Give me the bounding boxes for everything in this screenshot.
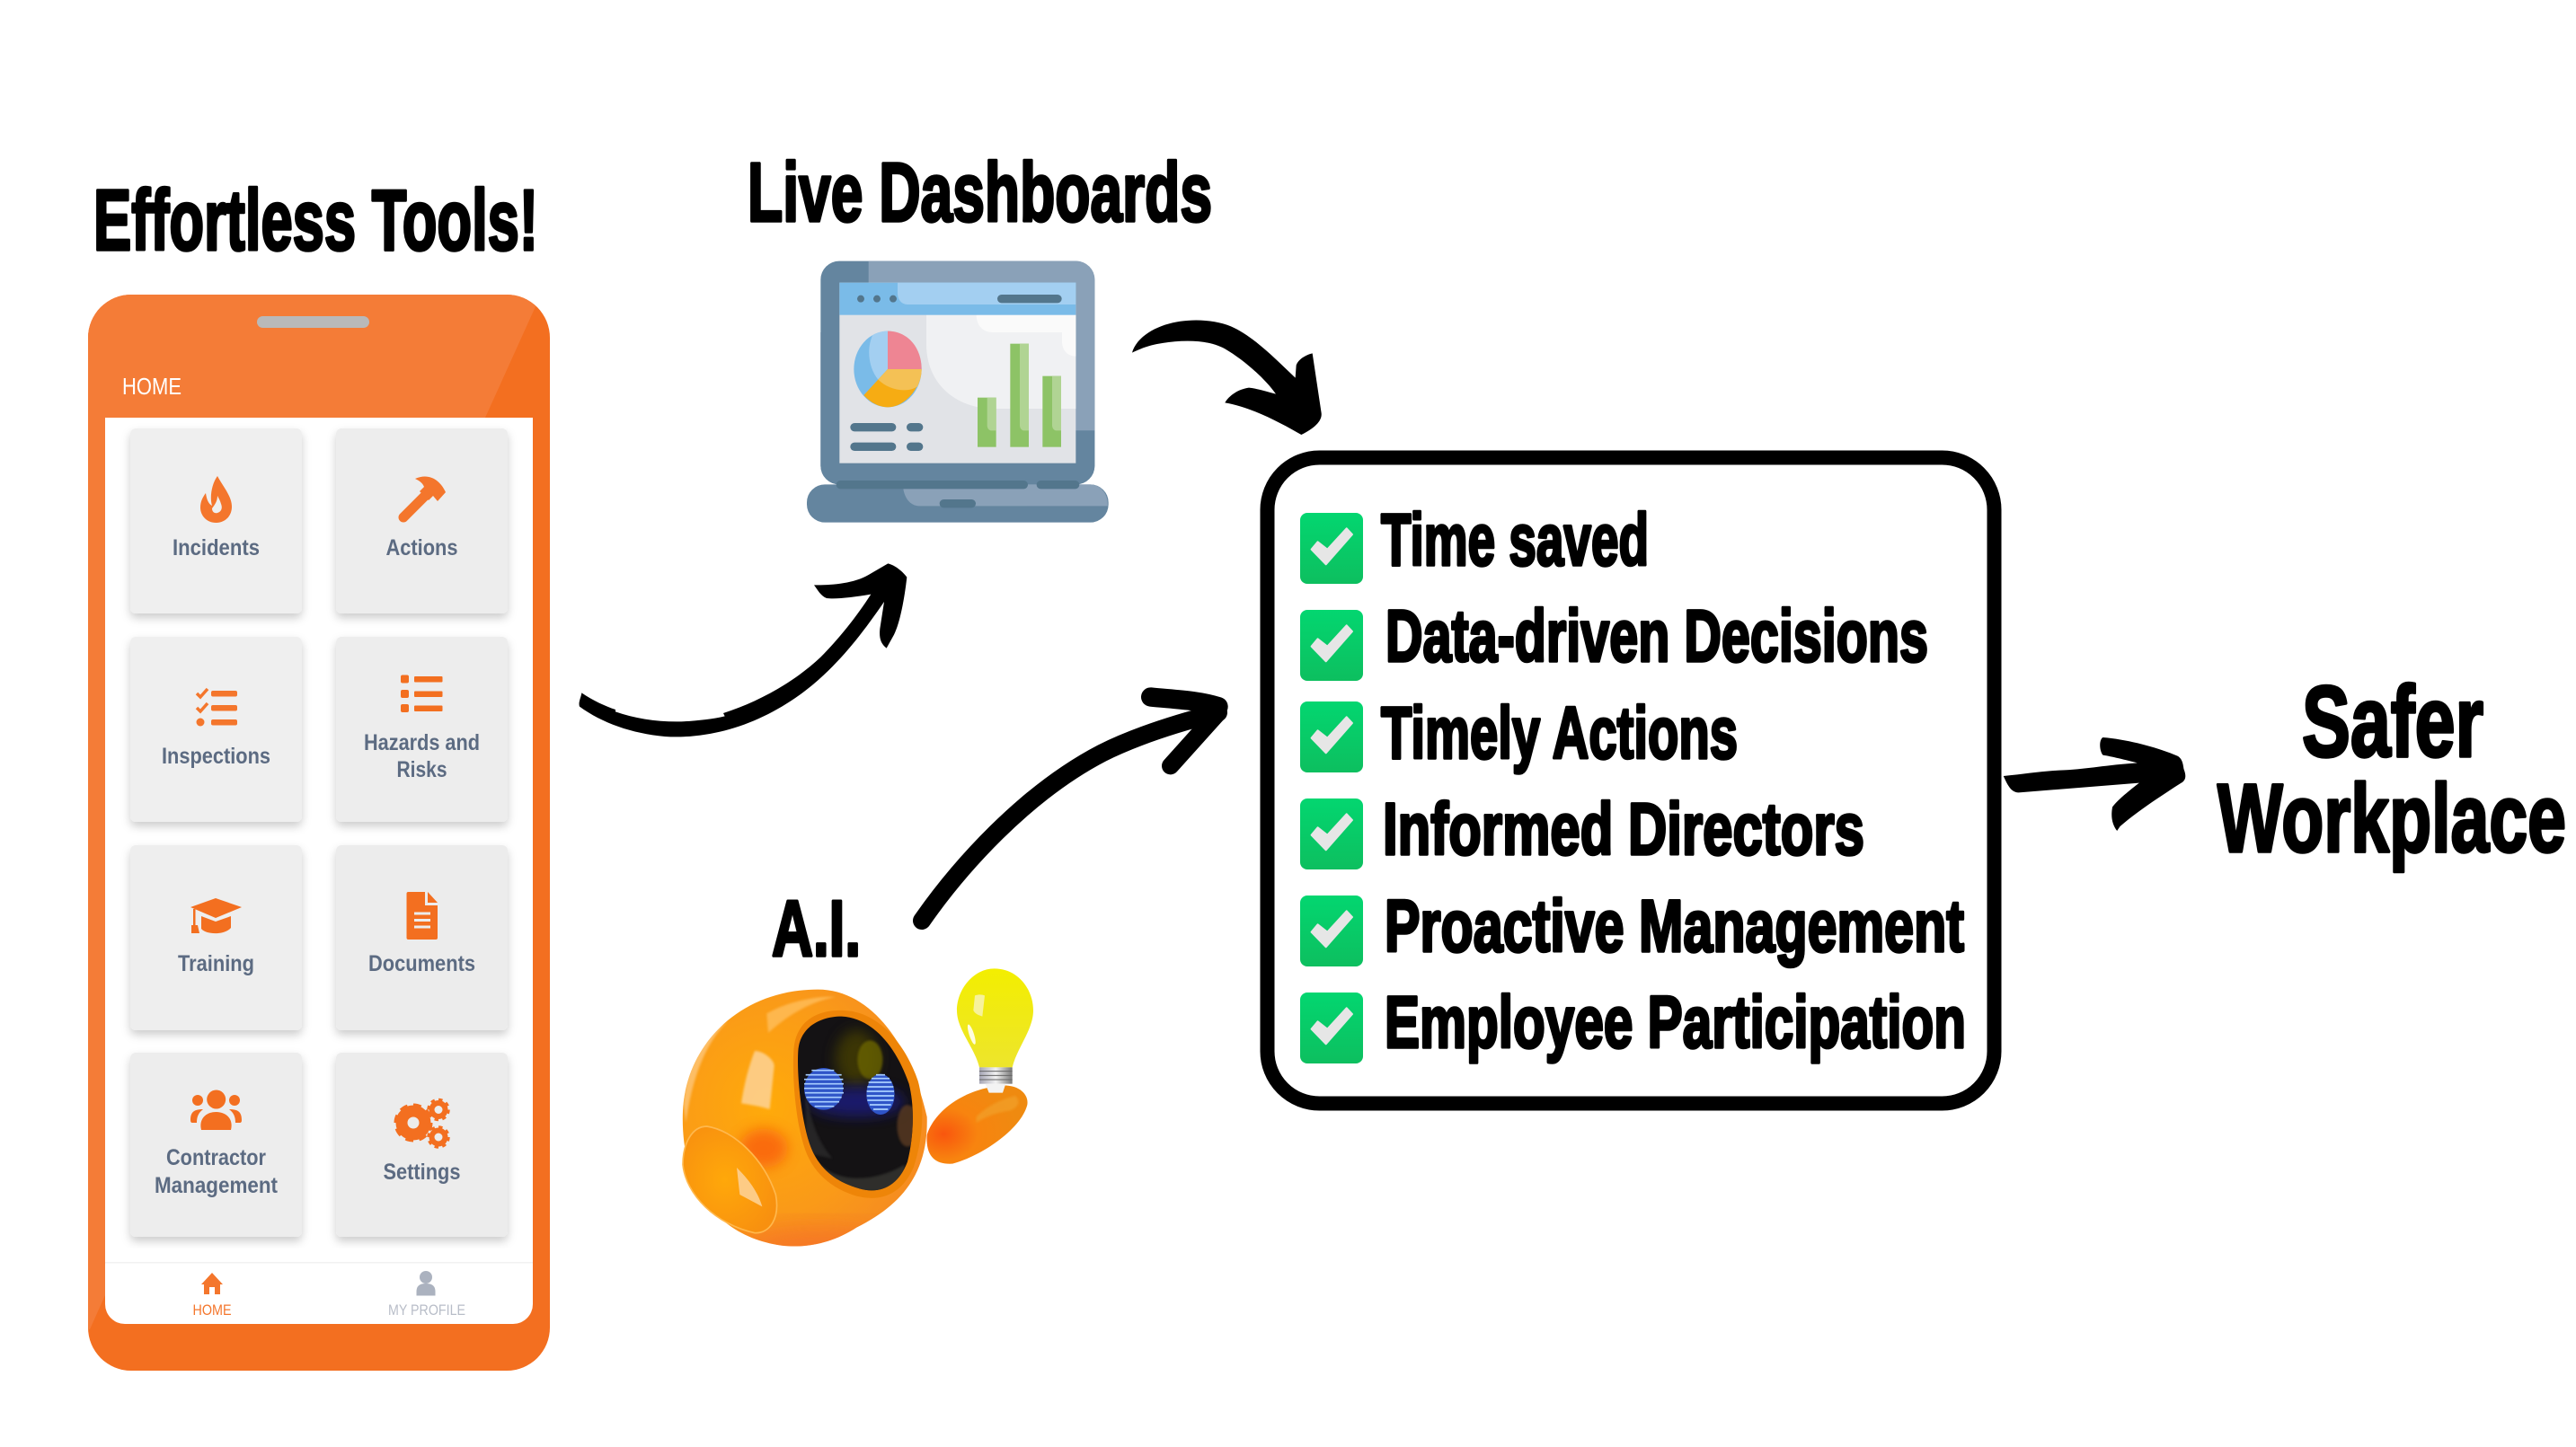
phone body highlight xyxy=(88,295,541,1329)
heading: Safer Workplace xyxy=(2217,666,2566,872)
icon: document xyxy=(406,892,438,940)
checklist item: Proactive Management: Proactive Management xyxy=(1385,886,1964,967)
pie chart xyxy=(854,331,922,407)
browser bar xyxy=(839,283,1076,315)
robot left arm xyxy=(683,1126,776,1233)
menu card: Documents xyxy=(336,845,508,1030)
menu card: Contractor Management: Contractor xyxy=(166,1145,266,1170)
icon: hammer xyxy=(403,477,446,517)
checklist item: Time saved: Time saved xyxy=(1381,499,1649,581)
bar chart xyxy=(978,344,1061,447)
robot eyes xyxy=(804,1068,895,1115)
menu card: Contractor Management xyxy=(130,1053,302,1237)
header label: HOME xyxy=(122,373,181,400)
visor xyxy=(798,1017,913,1190)
checklist item: Data-driven Decisions xyxy=(1300,596,1928,681)
menu card: Hazards and Risks: Hazards and xyxy=(364,730,480,755)
title: A.I.: A.I. xyxy=(772,884,861,973)
panel frame xyxy=(1267,458,1995,1103)
checklist item: Timely Actions: Timely Actions xyxy=(1381,693,1738,774)
phone body xyxy=(88,295,550,1371)
checklist item: Timely Actions xyxy=(1300,693,1738,774)
menu card: Documents: Documents xyxy=(368,951,475,976)
illustration: orange robot with light bulb xyxy=(683,968,1033,1264)
title: Effortless Tools: Effortless Tools! xyxy=(93,172,538,269)
robot arm xyxy=(926,1085,1028,1164)
phone screen xyxy=(105,418,533,1324)
menu card: Settings: Settings xyxy=(383,1160,460,1185)
checklist item: Proactive Management xyxy=(1300,886,1964,967)
laptop base xyxy=(807,484,1109,523)
icon: laptop dashboard xyxy=(807,261,1109,523)
menu card: Actions xyxy=(336,428,508,613)
icon: list xyxy=(401,675,442,712)
icon: team xyxy=(190,1090,242,1130)
heading: Safer Workplace: Safer xyxy=(2302,666,2483,778)
bottom navigation xyxy=(105,1262,533,1319)
robot body xyxy=(683,990,927,1247)
menu card: Training xyxy=(130,845,302,1030)
laptop lid xyxy=(820,261,1094,484)
menu card: Inspections xyxy=(130,637,302,822)
icon: flame xyxy=(200,476,232,523)
menu card: Training: Training xyxy=(178,951,254,976)
icon: gears xyxy=(396,1099,448,1147)
bottom navigation: MY PROFILE xyxy=(388,1301,465,1319)
visor reflections xyxy=(806,1030,918,1192)
arrow: dashboards to benefits xyxy=(1132,320,1322,435)
menu card: Incidents xyxy=(130,428,302,613)
screen mask below cards xyxy=(105,1248,533,1262)
menu card: Settings xyxy=(336,1053,508,1237)
checklist item: Employee Participation: Employee Participation xyxy=(1385,982,1966,1063)
icon: profile xyxy=(417,1271,435,1295)
bottom navigation: HOME xyxy=(192,1301,232,1319)
checklist item: Data-driven Decisions: Data-driven Decisions xyxy=(1385,596,1928,677)
light bulb xyxy=(957,968,1033,1093)
checklist item: Informed Directors xyxy=(1300,789,1864,870)
menu card: Incidents: Incidents xyxy=(173,535,260,560)
body shading xyxy=(684,997,896,1264)
data rows xyxy=(850,423,923,451)
icon: checklist xyxy=(196,689,237,726)
icon: home xyxy=(201,1273,223,1294)
menu card: Hazards and Risks xyxy=(336,637,508,822)
arrow: AI to benefits xyxy=(922,697,1218,921)
menu card: Inspections: Inspections xyxy=(162,744,270,769)
menu card: Hazards and Risks: Risks xyxy=(397,757,447,782)
arrow: phone to dashboards xyxy=(580,563,907,737)
panel: benefits checklist xyxy=(1267,458,1995,1103)
title: Live Dashboards: Live Dashboards xyxy=(748,146,1212,239)
checklist item: Informed Directors: Informed Directors xyxy=(1383,789,1864,870)
checklist item: Employee Participation xyxy=(1300,982,1966,1063)
phone speaker xyxy=(257,316,369,328)
menu card: Contractor Management: Management xyxy=(155,1173,279,1198)
laptop screen xyxy=(839,283,1076,463)
arm highlight xyxy=(977,1096,1018,1123)
visor rim xyxy=(793,1010,922,1198)
bulb base xyxy=(979,1067,1013,1084)
icon: graduation cap xyxy=(190,898,242,933)
panel: phone app xyxy=(88,295,550,1371)
left arm highlight xyxy=(737,1168,762,1206)
menu card: Actions: Actions xyxy=(386,535,458,560)
checklist item: Time saved xyxy=(1300,499,1649,584)
arrow: benefits to safer workplace xyxy=(2004,737,2185,831)
